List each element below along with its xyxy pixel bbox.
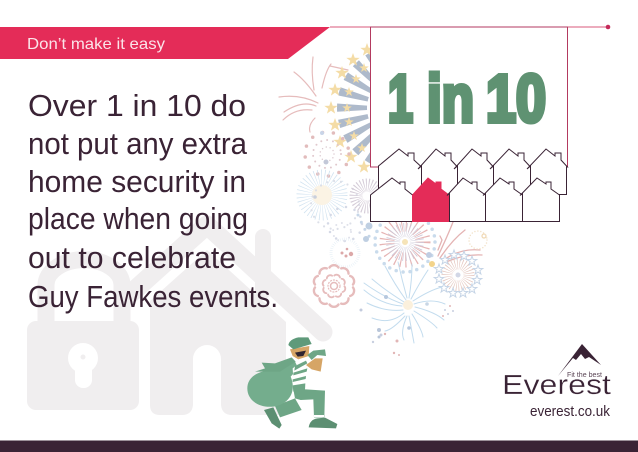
footer bar (0, 440, 638, 452)
burglar mouth (295, 351, 306, 357)
firework: scattered dots (360, 305, 454, 356)
firework: small circle burst (331, 239, 359, 267)
burglar front shoe (309, 418, 337, 428)
headline text (28, 88, 278, 314)
stat panel (370, 27, 568, 167)
firework: pink spray right (438, 222, 487, 262)
Everest logo (502, 344, 611, 400)
logo strapline: Fit the best (567, 372, 602, 379)
burglar cap (288, 337, 312, 349)
headline text: Guy Fawkes events. (28, 279, 278, 314)
background icon: grey house (128, 225, 323, 415)
headline text: place when going (28, 201, 248, 236)
illustration: burglar with sack (247, 337, 337, 429)
firework: pale blue fountain (364, 262, 445, 343)
logo wordmark: Everest (502, 369, 611, 400)
firework: star ring burst (434, 250, 483, 297)
burglar face (290, 346, 309, 359)
headline text: home security in (28, 164, 246, 199)
website address: everest.co.uk (530, 404, 611, 420)
firework: pale sunburst (307, 180, 337, 210)
burglar rear shoe (264, 407, 282, 429)
burglar sock (314, 415, 324, 417)
headline text: Over 1 in 10 do (28, 88, 246, 123)
firework: pink and blue centre burst (375, 212, 435, 272)
stat: 1 in 10: 10 (486, 62, 546, 136)
burglar arm (306, 358, 323, 372)
burglar torso (293, 358, 310, 392)
firework: dotted pink burst (305, 131, 349, 176)
top banner (0, 27, 330, 59)
burglar stripes (293, 361, 307, 392)
firework: dotted trails (311, 181, 372, 242)
firework: pink spray top left (279, 57, 348, 132)
burglar rear leg (275, 398, 302, 417)
stat: 1 in 10: in (427, 62, 474, 136)
logo mountain (558, 344, 601, 376)
background icon: grey padlock (27, 260, 139, 410)
houses grid: 1 in 10 highlighted (370, 149, 568, 222)
burglar front leg (293, 389, 325, 417)
stat: 1 in 10 (388, 62, 546, 136)
headline text: out to celebrate (28, 240, 236, 275)
firework: pink flower (313, 265, 355, 307)
burglar sack (247, 362, 298, 407)
stat: 1 in 10: 1 (388, 62, 413, 136)
firework: purple and tan burst (356, 185, 378, 207)
banner text: Don’t make it easy (27, 36, 165, 53)
firework: striped sun rays with stars (324, 43, 448, 173)
burglar hand knot (307, 349, 326, 360)
burglar sack flap (255, 357, 296, 372)
headline text: not put any extra (28, 126, 248, 161)
top rule with end dot (330, 25, 610, 29)
